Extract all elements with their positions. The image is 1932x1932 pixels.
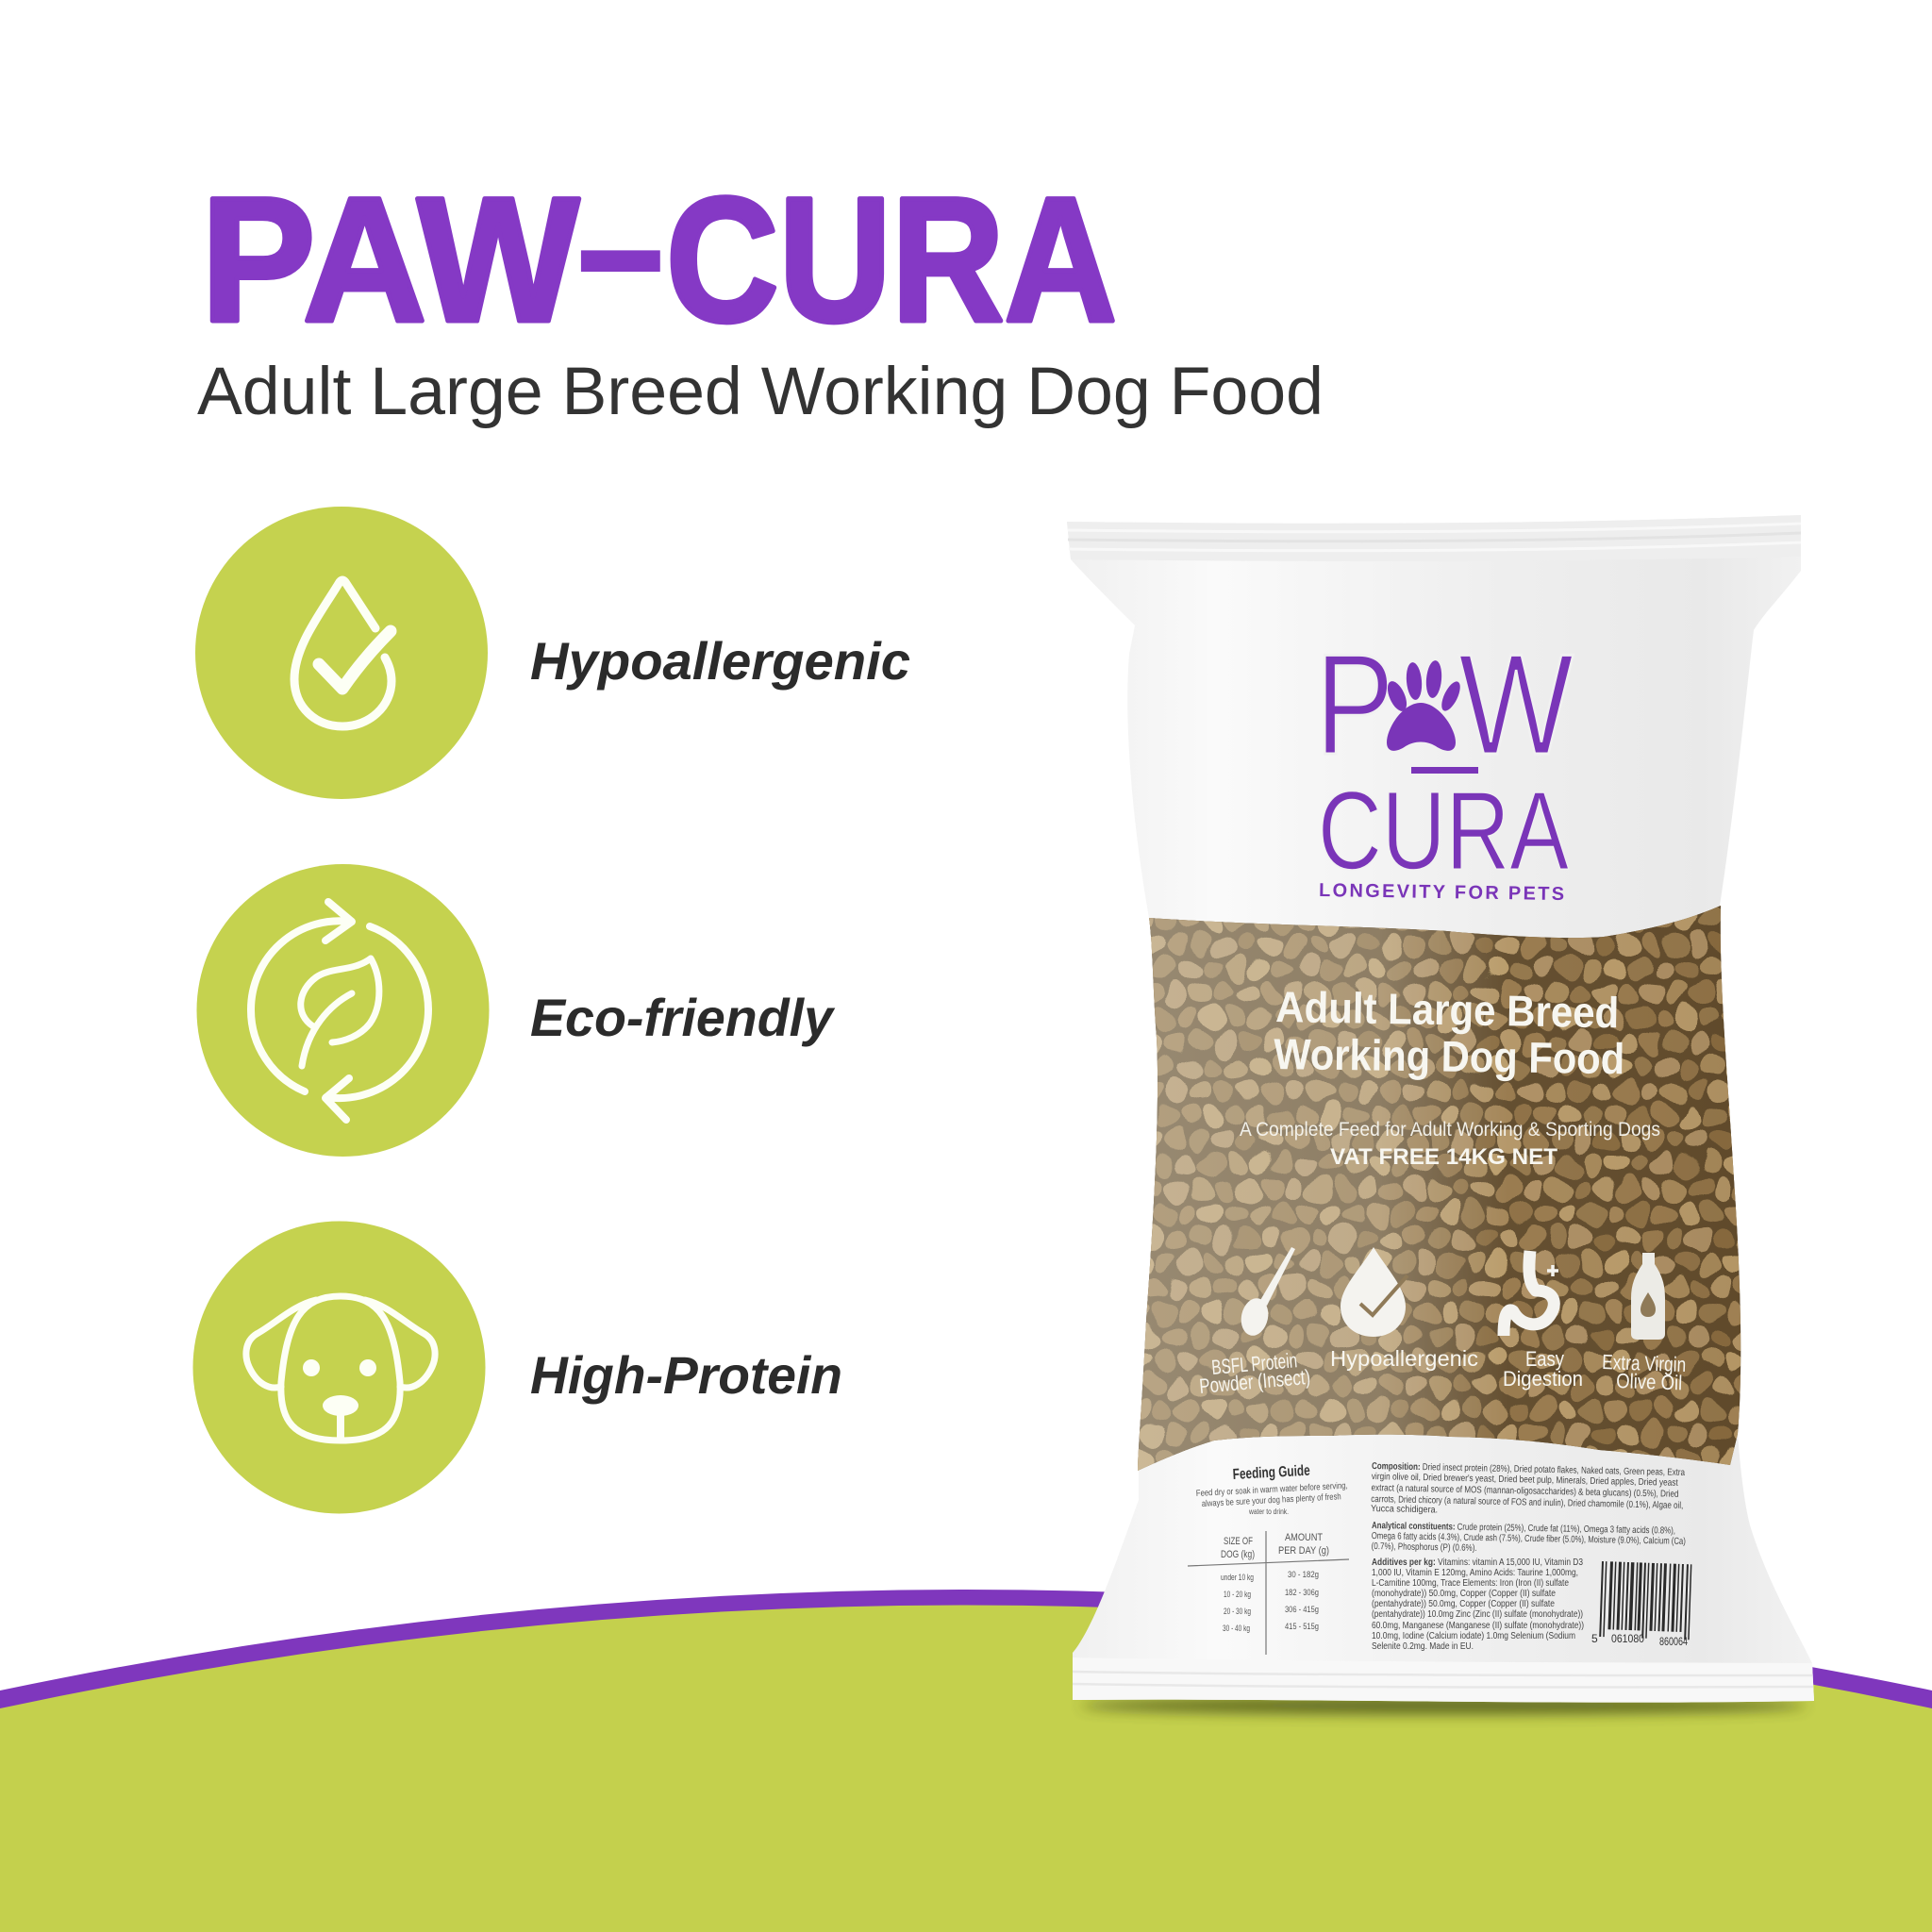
title: CURA	[666, 160, 1117, 358]
feeding table: under 10 kg	[1221, 1573, 1254, 1582]
net weight: VAT FREE 14KG NET	[1330, 1144, 1557, 1170]
product bag	[1067, 515, 1814, 1703]
bag icon captions: Hypoallergenic	[1330, 1346, 1478, 1371]
additives text: Selenite 0.2mg. Made in EU.	[1372, 1641, 1474, 1652]
bag headline	[1274, 982, 1625, 1083]
bag icon captions: BSFL Protein	[1210, 1348, 1298, 1379]
logo word CURA: CURA	[1318, 769, 1569, 893]
feeding table: DOG (kg)	[1221, 1549, 1255, 1560]
feeding table: 30 - 182g	[1288, 1570, 1319, 1579]
feeding guide heading: Feeding Guide	[1232, 1463, 1310, 1483]
feeding table: 415 - 515g	[1285, 1622, 1319, 1631]
subtitle: Adult Large Breed Working Dog Food	[197, 355, 1324, 429]
bag icon: oil bottle	[1631, 1253, 1665, 1340]
composition text: Yucca schidigera.	[1371, 1504, 1438, 1515]
bag icon captions: Powder (Insect)	[1198, 1365, 1311, 1398]
bag icon captions	[1198, 1346, 1687, 1398]
bag icon captions: Extra Virgin	[1602, 1350, 1687, 1376]
title: -	[569, 146, 673, 346]
bag icon captions: Easy	[1525, 1347, 1564, 1371]
bag headline: Working Dog Food	[1274, 1029, 1625, 1083]
feeding table: 20 - 30 kg	[1224, 1607, 1251, 1616]
bag headline: Adult Large Breed	[1275, 982, 1620, 1037]
composition text: carrots, Dried chicory (a natural source of FOS and inulin), Dried chamomile (0.1%), Algae oil,	[1371, 1494, 1683, 1511]
bag body	[1067, 515, 1814, 1703]
feeding table: 182 - 306g	[1285, 1588, 1319, 1597]
additives text: 1,000 IU, Vitamin E 120mg, Amino Acids: Taurine 1,000mg,	[1372, 1568, 1578, 1578]
feeding guide text: always be sure your dog has plenty of fresh	[1202, 1491, 1341, 1509]
feeding guide text: water to drink.	[1248, 1507, 1289, 1516]
bag icon: spoon	[1238, 1247, 1295, 1338]
icon circle: recycling leaf	[196, 864, 489, 1157]
analytical constituents text: Omega 6 fatty acids (4.3%), Crude ash (7.5%), Crude fiber (5.0%), Moisture (9.0%), Calcium (Ca)	[1372, 1531, 1686, 1547]
composition text	[1371, 1461, 1685, 1521]
logo word PAW: W	[1458, 625, 1574, 785]
additives text: 60.0mg, Manganese (Manganese (II) sulfate (monohydrate))	[1372, 1621, 1584, 1631]
feeding table: 10 - 20 kg	[1224, 1590, 1251, 1599]
analytical constituents text: Analytical constituents: Crude protein (25%), Crude fat (11%), Omega 3 fatty acids (0.8%),	[1372, 1521, 1675, 1537]
composition text: Composition: Dried insect protein (28%), Dried potato flakes, Naked oats, Green peas, Extra	[1372, 1461, 1685, 1478]
label: Hypoallergenic	[530, 631, 910, 691]
feeding table: 306 - 415g	[1285, 1605, 1319, 1614]
shadow under bag	[1080, 1697, 1807, 1714]
logo	[1315, 625, 1574, 905]
feeding guide	[1188, 1463, 1349, 1655]
purple arc	[0, 1590, 1932, 1726]
bag icon: drop with check	[1341, 1247, 1407, 1337]
feeding guide text: Feed dry or soak in warm water before serving,	[1196, 1481, 1348, 1499]
bottom seal	[1073, 1657, 1814, 1703]
green ground	[0, 1606, 1932, 1932]
barcode: 860064	[1659, 1635, 1688, 1648]
additives text: 10.0mg, Iodine (Calcium iodate) 1.0mg Selenium (Sodium	[1372, 1631, 1575, 1641]
additives text: (pentahydrate)) 50.0mg, Copper (Copper (II) sulfate	[1372, 1599, 1555, 1609]
bag icon captions: Olive Oil	[1616, 1369, 1683, 1394]
title: PAW	[201, 160, 580, 358]
barcode	[1591, 1561, 1691, 1648]
feature: hypoallergenic	[195, 507, 910, 799]
icon circle: water drop with check	[195, 507, 488, 799]
label: Eco-friendly	[530, 988, 836, 1047]
barcode: 5	[1591, 1632, 1598, 1645]
analytical constituents text	[1372, 1521, 1686, 1557]
feature: eco-friendly	[196, 864, 836, 1157]
kibble window	[1138, 906, 1741, 1471]
feature: high-protein	[192, 1221, 842, 1513]
logo bar	[1411, 767, 1478, 774]
logo word PAW	[1315, 625, 1574, 785]
bag icon captions: Digestion	[1503, 1367, 1583, 1391]
icon: paw print	[1384, 659, 1464, 751]
feeding table: AMOUNT	[1285, 1532, 1323, 1543]
top seal	[1067, 515, 1801, 561]
tagline: LONGEVITY FOR PETS	[1319, 880, 1564, 905]
logo word PAW: P	[1315, 625, 1394, 785]
feeding guide text	[1196, 1481, 1348, 1516]
icon circle: dog face	[192, 1221, 485, 1513]
composition text: extract (a natural source of MOS (mannan-oligosaccharides) & beta glucans) (0.5%), Dried	[1371, 1483, 1679, 1500]
additives text: (monohydrate)) 50.0mg, Copper (Copper (II) sulfate	[1372, 1589, 1556, 1599]
analytical constituents text: (0.7%), Phosphorus (P) (0.6%).	[1372, 1541, 1477, 1554]
feeding table: 30 - 40 kg	[1223, 1624, 1250, 1633]
additives text: L-Carnitine 100mg, Trace Elements: Iron (Iron (II) sulfate	[1372, 1578, 1569, 1589]
feeding table: SIZE OF	[1224, 1536, 1253, 1547]
label: High-Protein	[530, 1345, 842, 1405]
additives text: Additives per kg: Vitamins: vitamin A 15,000 IU, Vitamin D3	[1372, 1557, 1583, 1568]
feeding table: PER DAY (g)	[1278, 1545, 1329, 1557]
title	[201, 146, 1117, 358]
barcode: 061080	[1611, 1632, 1644, 1645]
composition text: virgin olive oil, Dried brewer's yeast, Dried beet pulp, Minerals, Dried apples, Dried yeast	[1372, 1472, 1678, 1489]
bag icon: stomach	[1504, 1251, 1558, 1336]
feeding table	[1188, 1531, 1349, 1655]
bag sub-headline: A Complete Feed for Adult Working & Sporting Dogs	[1240, 1119, 1660, 1141]
additives text	[1372, 1557, 1584, 1652]
additives text: (pentahydrate)) 10.0mg Zinc (Zinc (II) sulfate (monohydrate))	[1372, 1609, 1583, 1620]
